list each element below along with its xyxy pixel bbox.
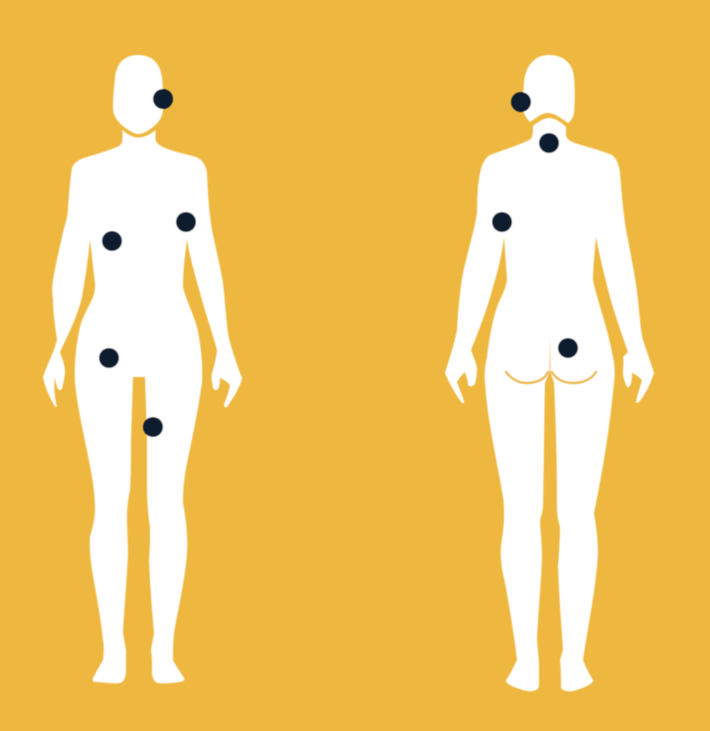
back head [523,55,575,123]
marker: temple [153,89,173,109]
back body [445,118,654,691]
marker: right ribs [102,231,122,251]
marker: upper arm [492,212,512,232]
buttock crease: right [552,372,596,383]
buttock crease: left [506,372,548,383]
front head [113,55,163,134]
marker: left upper chest [176,212,196,232]
marker: back of head [511,92,531,112]
front body [43,130,242,683]
figure: back view [445,55,654,691]
marker: lower back [558,338,578,358]
marker: hip [99,348,119,368]
marker: inner thigh [143,417,163,437]
marker: neck [539,133,559,153]
figure: front view [43,55,242,683]
